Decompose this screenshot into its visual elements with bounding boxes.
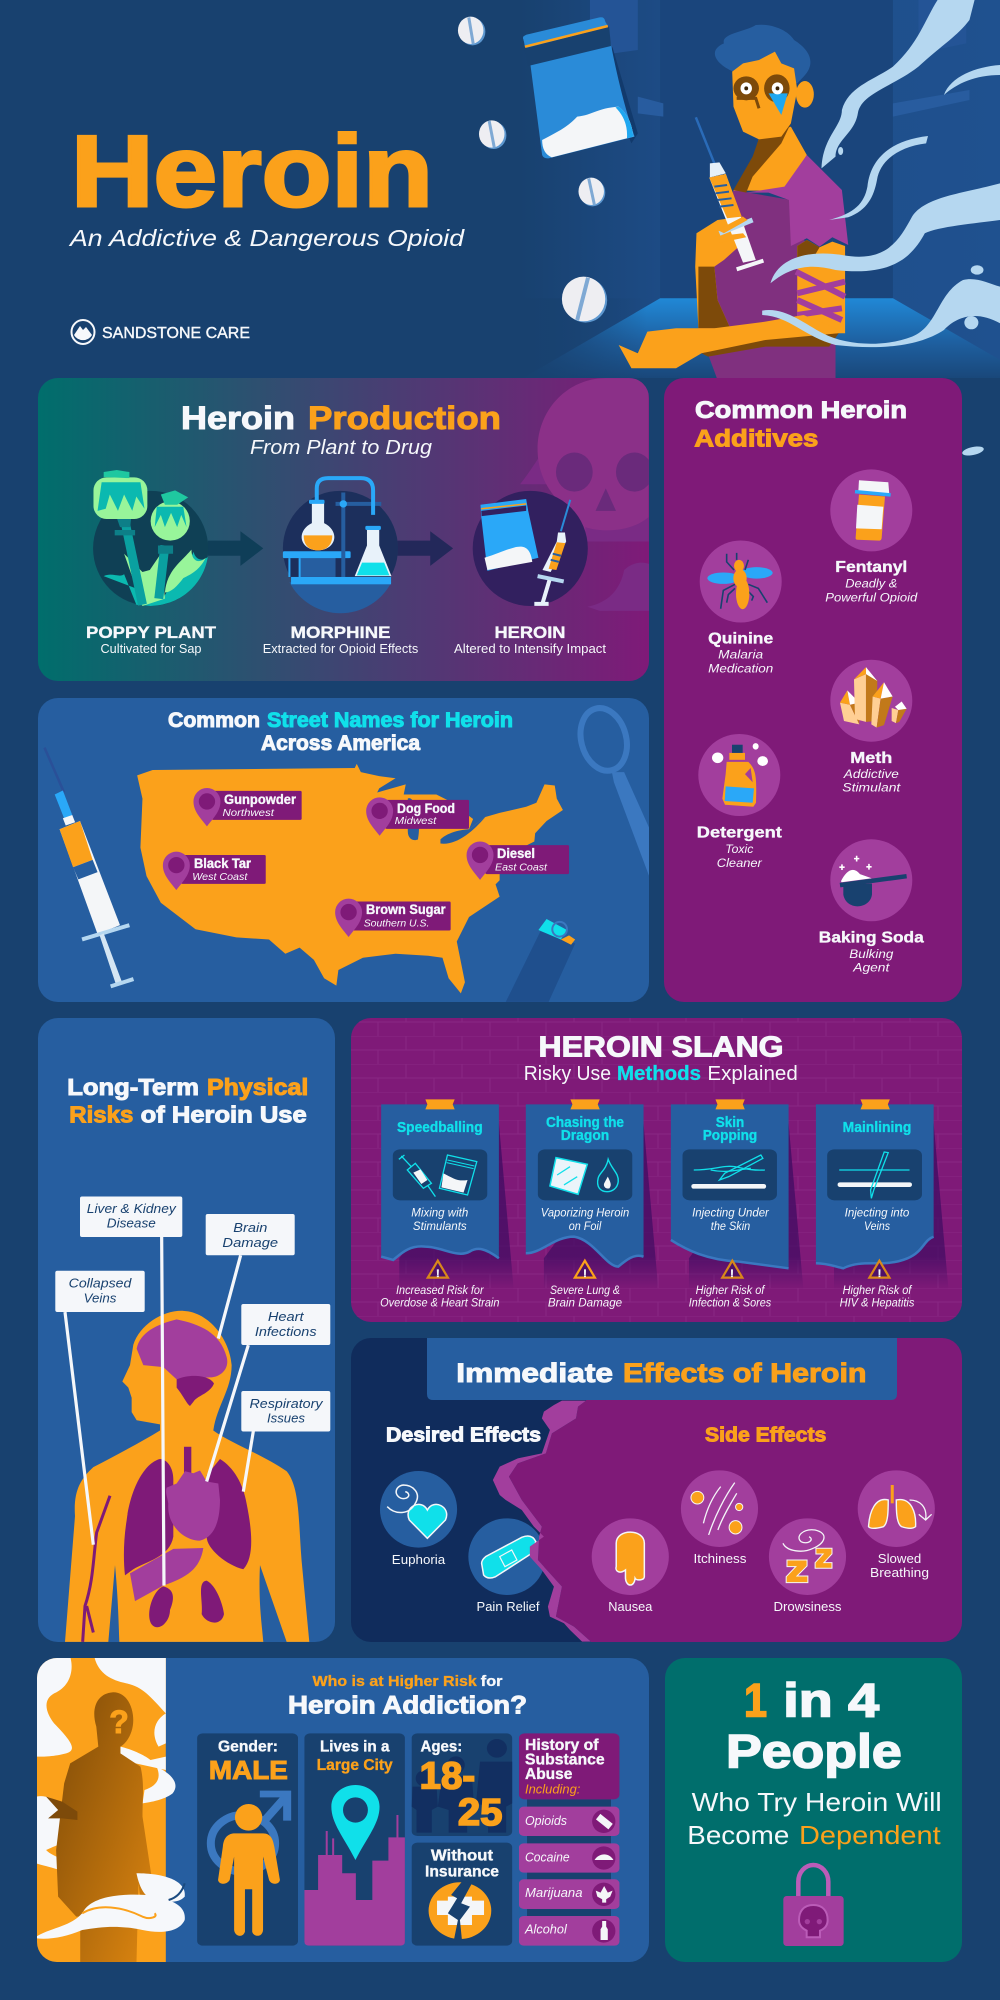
head	[715, 25, 814, 139]
card: Mainlining: HIV & Hepatitis	[840, 1298, 915, 1310]
card: Skin Popping: Skin	[716, 1114, 744, 1131]
card: Chasing the Dragon: Chasing the	[546, 1114, 624, 1131]
tile: history of substance abuse: Including:	[525, 1782, 580, 1796]
callout: Brain Damage: Brain	[233, 1221, 267, 1235]
panel background	[351, 1018, 962, 1322]
tile: large city: Lives in a	[320, 1739, 390, 1756]
callout: Respiratory Issues: Issues	[267, 1412, 305, 1426]
callout: Brain Damage	[206, 1214, 295, 1255]
label: heroin: HEROIN	[494, 623, 566, 642]
additive: Detergent: Toxic	[725, 844, 754, 856]
card: Chasing the Dragon: Brain Damage	[548, 1298, 622, 1310]
icon: morphine lab	[283, 478, 398, 613]
panel background	[664, 378, 962, 1002]
callout: Respiratory Issues: Respiratory	[250, 1397, 323, 1411]
side effect: Drowsiness: Drowsiness	[774, 1599, 842, 1614]
card: Chasing the Dragon: Dragon	[561, 1127, 609, 1144]
panel: who is at higher risk	[36, 1657, 649, 1963]
heading: for	[481, 1673, 503, 1690]
panel background	[38, 698, 649, 1002]
icon: lighter	[506, 919, 575, 1002]
additive: Baking Soda: Agent	[852, 963, 890, 975]
smoke	[762, 0, 1000, 347]
panel: street names map	[38, 698, 651, 1002]
callout: Heart Infections: Infections	[255, 1325, 317, 1339]
additive: Fentanyl: Fentanyl	[835, 559, 907, 576]
side effect: Slowed Breathing: Slowed	[878, 1551, 921, 1566]
callout: Brain Damage: Damage	[222, 1236, 278, 1250]
side effect: Itchiness: Itchiness	[694, 1551, 747, 1566]
icon: broken medical cross	[429, 1882, 491, 1940]
additive: Baking Soda	[819, 839, 924, 975]
panel: additives	[664, 378, 962, 1002]
statistic: in 4	[783, 1674, 879, 1727]
card: Mainlining: !	[878, 1268, 881, 1280]
card: Speedballing: Stimulants	[413, 1219, 467, 1233]
panel: immediate effects	[351, 1330, 972, 1650]
card: Chasing the Dragon: on Foil	[569, 1219, 602, 1233]
item: Alcohol	[519, 1916, 619, 1946]
heading: Across America	[261, 732, 420, 755]
additive: Meth: Addictive	[843, 769, 899, 781]
figure with smoke	[36, 1657, 185, 1963]
map label: Black Tar: Black Tar	[194, 856, 252, 871]
callout: Collapsed Veins: Veins	[84, 1292, 116, 1306]
card: Skin Popping: Injecting Under	[692, 1206, 770, 1220]
heading: Side Effects: Side Effects	[705, 1425, 826, 1447]
callout: Liver & Kidney Disease: Liver & Kidney	[87, 1202, 177, 1216]
skull watermark	[520, 378, 657, 611]
smoke wisp beside additives panel	[961, 445, 985, 457]
tile: history of substance abuse: History of	[525, 1737, 599, 1754]
label: heroin: Altered to Intensify Impact	[454, 642, 607, 656]
label: Pain Relief: Pain Relief	[476, 1599, 540, 1614]
label: morphine	[263, 623, 418, 656]
icon: needle into vein	[838, 1152, 912, 1198]
callout: Heart Infections	[241, 1304, 330, 1345]
additive: Quinine: Quinine	[708, 630, 774, 648]
tile: gender male: Gender:	[218, 1739, 278, 1756]
item: Marijuana	[519, 1879, 619, 1909]
logo: Sandstone Care: SANDSTONE CARE	[102, 325, 250, 342]
additive: Detergent: Cleaner	[717, 858, 763, 870]
label: heroin	[454, 623, 607, 656]
tile: history of substance abuse: Substance	[525, 1751, 605, 1768]
tile: large city	[304, 1733, 405, 1946]
map label: Gunpowder: Gunpowder	[224, 792, 297, 807]
icon: heroin bag and syringe	[473, 491, 588, 606]
additive: Quinine: Malaria	[718, 650, 763, 662]
heading: Risks	[69, 1102, 133, 1128]
label: morphine: Extracted for Opioid Effects	[263, 642, 418, 656]
syringe	[696, 117, 763, 269]
card: Mainlining: Injecting into	[845, 1206, 910, 1220]
map label: Brown Sugar: Southern U.S.	[364, 917, 429, 929]
card: Speedballing: Overdose & Heart Strain	[380, 1298, 499, 1310]
heading: HEROIN SLANG	[538, 1032, 784, 1064]
heading	[168, 709, 513, 755]
heading	[67, 1074, 308, 1128]
icon: spoon	[578, 705, 649, 876]
label: morphine: MORPHINE	[290, 623, 390, 642]
heading: Desired Effects: Desired Effects	[386, 1425, 541, 1447]
title: Heroin	[71, 116, 433, 228]
statement: Who Try Heroin Will	[692, 1787, 942, 1817]
tile: history of substance abuse: Abuse	[525, 1766, 573, 1783]
card: Skin Popping: Infection & Sores	[689, 1298, 771, 1310]
card: Chasing the Dragon	[526, 1099, 658, 1310]
map label: Gunpowder	[193, 788, 302, 826]
additive: Fentanyl: Powerful Opioid	[825, 592, 918, 604]
statistic	[726, 1674, 902, 1777]
side effect: Nausea	[592, 1518, 669, 1614]
item: Opioids: Opioids	[525, 1814, 567, 1828]
banner heading	[427, 1338, 897, 1400]
tile: gender male: MALE	[209, 1755, 288, 1785]
map label: Dog Food: Midwest	[395, 815, 437, 827]
icon: syringe	[44, 748, 133, 986]
additive: Detergent	[697, 734, 782, 870]
statement: Dependent	[799, 1820, 942, 1850]
logo: Sandstone Care	[72, 320, 250, 344]
arrow: poppy to morphine	[208, 531, 263, 566]
callout: Liver & Kidney Disease: Disease	[107, 1217, 156, 1231]
torn edge	[493, 1330, 972, 1650]
card: Mainlining: Mainlining	[843, 1119, 911, 1136]
map label: Diesel: East Coast	[495, 862, 548, 874]
heading	[181, 400, 501, 436]
additive: Fentanyl	[825, 469, 918, 604]
tile: ages: 25	[458, 1792, 502, 1834]
side effect: Slowed Breathing	[858, 1470, 935, 1580]
additive: Baking Soda: Bulking	[849, 949, 894, 961]
heading	[694, 397, 907, 453]
item: Alcohol: Alcohol	[524, 1923, 568, 1937]
heading: Physical	[207, 1074, 308, 1100]
heading: Heroin	[181, 400, 295, 436]
callout: Collapsed Veins	[55, 1271, 145, 1312]
subheading: Methods	[617, 1063, 701, 1085]
drug bag	[523, 17, 638, 158]
tile: without insurance: Insurance	[425, 1863, 499, 1880]
card: Mainlining: Higher Risk of	[843, 1285, 913, 1297]
subheading: Explained	[707, 1063, 798, 1085]
card: Mainlining: Veins	[864, 1219, 890, 1233]
card: Speedballing: !	[436, 1268, 440, 1280]
additive: Fentanyl: Deadly &	[845, 579, 898, 591]
heading: Street Names for Heroin	[267, 709, 513, 732]
map label: Gunpowder: Northwest	[222, 807, 275, 819]
item: Marijuana: Marijuana	[525, 1886, 583, 1900]
header illustration	[458, 0, 1000, 380]
room background	[520, 0, 1000, 380]
tile: gender male	[197, 1733, 298, 1946]
subheading	[524, 1063, 798, 1085]
additive: Baking Soda: Baking Soda	[819, 929, 924, 946]
map: United States	[137, 764, 563, 993]
card: Skin Popping: Popping	[703, 1127, 757, 1144]
subtitle: An Addictive & Dangerous Opioid	[68, 225, 465, 251]
card: Chasing the Dragon: !	[583, 1268, 587, 1280]
map label: Dog Food	[366, 797, 469, 836]
label: poppy plant	[86, 623, 217, 656]
map label: Dog Food: Dog Food	[397, 801, 455, 816]
icon: padlock with skull	[783, 1865, 844, 1946]
card: Mainlining	[816, 1099, 949, 1310]
statement	[687, 1787, 942, 1850]
icon: male symbol	[211, 1791, 291, 1936]
label: poppy plant: POPPY PLANT	[86, 623, 217, 642]
map label: Black Tar: West Coast	[192, 871, 248, 883]
additive: Meth	[830, 660, 912, 795]
map label: Diesel: Diesel	[497, 846, 535, 861]
icon: needle under skin	[691, 1155, 766, 1189]
panel background	[37, 1658, 649, 1962]
label: poppy plant: Cultivated for Sap	[100, 642, 202, 656]
heading: Production	[308, 400, 501, 436]
body diagram	[65, 1237, 309, 1642]
heading: Common Heroin	[695, 397, 907, 424]
arrow: morphine to heroin	[398, 531, 453, 566]
icon: euphoria	[380, 1471, 457, 1548]
tile: without insurance: Without	[431, 1848, 493, 1865]
icon: warning	[869, 1261, 889, 1278]
icon: syringe and bag	[399, 1155, 477, 1197]
icon: pain relief	[468, 1518, 545, 1595]
map label: Brown Sugar: Brown Sugar	[366, 902, 446, 917]
person	[619, 25, 848, 380]
icon: silhouettes	[412, 1739, 512, 1833]
panel: heroin production	[38, 378, 657, 681]
icon: warning	[722, 1261, 742, 1278]
card: Skin Popping: !	[730, 1268, 734, 1280]
card: Chasing the Dragon: Vaporizing Heroin	[541, 1206, 629, 1220]
card: Skin Popping: the Skin	[711, 1219, 750, 1233]
card: Speedballing: Increased Risk for	[396, 1285, 485, 1297]
statistic: 1	[744, 1674, 767, 1727]
heading: Additives	[694, 426, 818, 453]
tile: ages	[412, 1733, 512, 1836]
additive: Detergent: Detergent	[697, 824, 782, 841]
callout: Collapsed Veins: Collapsed	[69, 1277, 133, 1291]
panel background	[38, 1018, 335, 1642]
additive: Quinine	[700, 540, 782, 676]
desired effects side	[351, 1330, 972, 1650]
icon: warning	[575, 1261, 595, 1278]
callout: Heart Infections: Heart	[268, 1310, 304, 1324]
icon: skyline	[304, 1815, 405, 1946]
tile: history of substance abuse	[519, 1733, 619, 1939]
additive: Meth: Stimulant	[842, 783, 901, 795]
heading: Common	[168, 709, 260, 732]
banner heading: Immediate	[456, 1358, 613, 1388]
tile: ages: Ages:	[420, 1739, 462, 1756]
card: Speedballing	[380, 1099, 514, 1310]
tile: ages: 18-	[420, 1755, 475, 1797]
additive: Meth: Meth	[850, 750, 892, 767]
heading: Long-Term	[67, 1074, 199, 1100]
side effect: Drowsiness	[769, 1518, 846, 1614]
card: Skin Popping: Higher Risk of	[696, 1285, 766, 1297]
subheading: Risky Use	[524, 1063, 611, 1085]
callout: Respiratory Issues	[241, 1391, 330, 1432]
side effect: Nausea: Nausea	[608, 1599, 653, 1614]
card: Speedballing: Mixing with	[411, 1206, 469, 1220]
item: Cocaine	[519, 1843, 619, 1873]
subheading: From Plant to Drug	[250, 437, 432, 459]
icon: foil and flame	[550, 1158, 618, 1194]
panel: heroin slang	[351, 1018, 962, 1322]
tile: without insurance	[412, 1843, 512, 1946]
label: Euphoria: Euphoria	[392, 1552, 446, 1567]
icon: warning	[428, 1261, 448, 1278]
item: Cocaine: Cocaine	[525, 1851, 570, 1865]
card: Skin Popping	[671, 1099, 803, 1310]
icon: location pin	[331, 1785, 380, 1860]
side effect: Itchiness	[681, 1470, 758, 1566]
statistic: People	[726, 1724, 902, 1777]
item: Opioids	[519, 1807, 619, 1836]
question mark: ?	[109, 1704, 129, 1740]
heading: Heroin Addiction?	[288, 1691, 527, 1719]
panel: long-term physical risks	[38, 1018, 335, 1642]
panel: 1 in 4 people	[665, 1658, 962, 1962]
card: Speedballing: Speedballing	[397, 1119, 483, 1136]
pills	[458, 17, 607, 323]
card: Chasing the Dragon: Severe Lung &	[550, 1285, 620, 1297]
callout: Liver & Kidney Disease	[80, 1196, 182, 1237]
panel background	[665, 1658, 962, 1962]
tile: large city: Large City	[317, 1757, 393, 1774]
additive: Quinine: Medication	[708, 664, 773, 676]
map label: Brown Sugar	[335, 899, 451, 937]
banner heading: Effects of Heroin	[623, 1358, 866, 1388]
side effect: Slowed Breathing: Breathing	[870, 1565, 929, 1580]
panel background	[38, 378, 649, 681]
statement: Become	[687, 1820, 789, 1850]
heading: Who is at Higher Risk	[312, 1673, 477, 1690]
map label: Black Tar	[163, 852, 266, 890]
heading	[288, 1673, 527, 1719]
icon: poppy plant	[93, 470, 208, 606]
map label: Diesel	[467, 841, 569, 880]
heading: of Heroin Use	[141, 1102, 307, 1128]
